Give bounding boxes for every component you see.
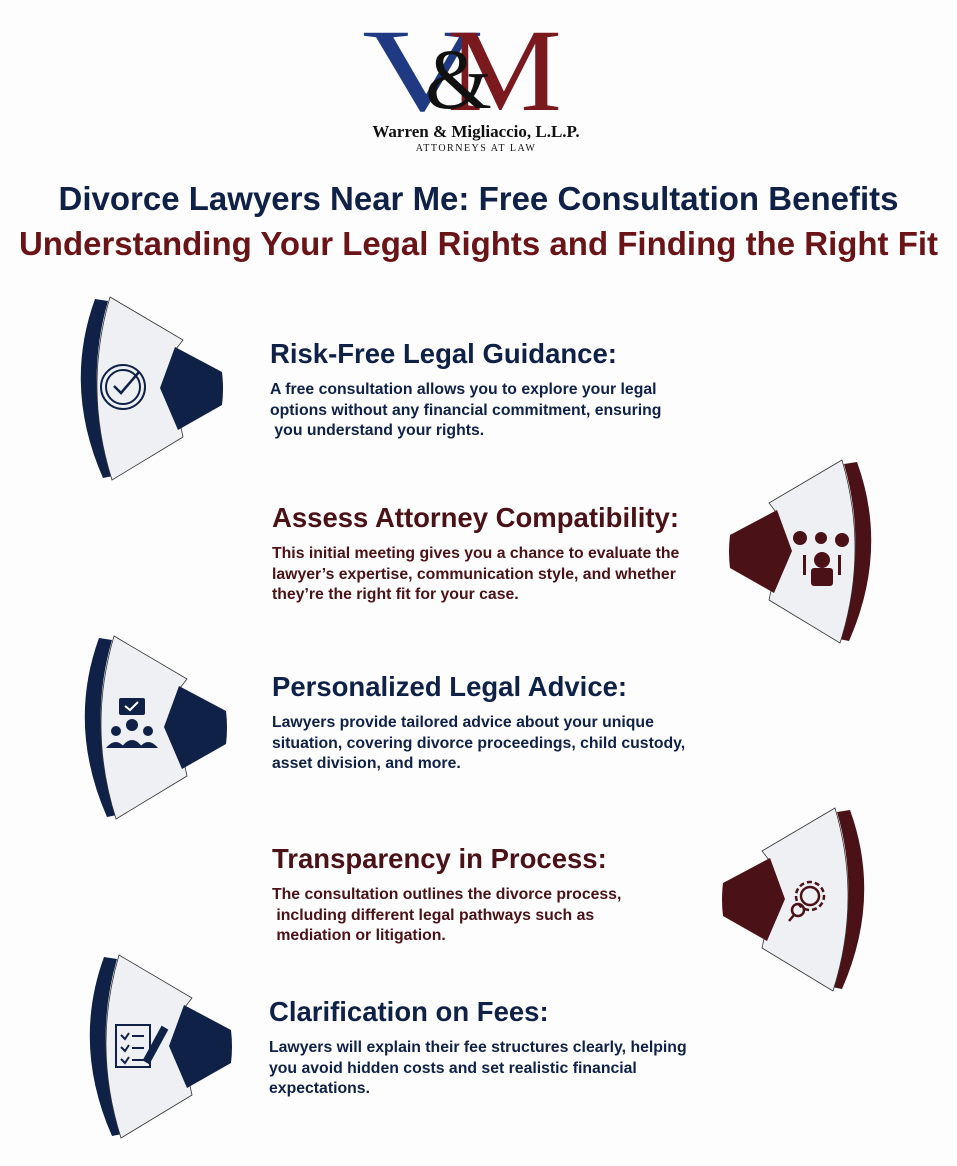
item 5 text — [269, 996, 687, 1097]
item 3 text: asset division, and more. — [272, 755, 461, 772]
subtitle: Understanding Your Legal Rights and Finding the Right Fit — [19, 225, 938, 262]
item 3 text: Lawyers provide tailored advice about your unique — [272, 714, 654, 731]
icon: transparency process gear — [722, 808, 864, 991]
item 4 text: mediation or litigation. — [276, 927, 446, 944]
item 3 text: situation, covering divorce proceedings, child custody, — [272, 734, 685, 752]
icon: personalized advice group — [85, 636, 227, 819]
item 1 text: options without any financial commitment, ensuring — [270, 402, 661, 418]
logo: ATTORNEYS AT LAW — [416, 143, 536, 154]
icon: fees document — [90, 955, 232, 1138]
logo: V — [362, 5, 482, 136]
item 2 text: This initial meeting gives you a chance to evaluate the — [272, 545, 679, 562]
item 3 text: Personalized Legal Advice: — [272, 671, 627, 702]
item 4 text: The consultation outlines the divorce process, — [272, 886, 621, 903]
item 2 text: lawyer’s expertise, communication style, and whether — [272, 566, 676, 582]
item 4 text: Transparency in Process: — [272, 843, 607, 874]
item 5 text: Clarification on Fees: — [269, 996, 549, 1027]
logo: M — [447, 5, 562, 136]
item 2 text: Assess Attorney Compatibility: — [272, 502, 679, 533]
logo — [362, 5, 580, 154]
item 3 text — [272, 671, 685, 772]
item 5 text: Lawyers will explain their fee structures clearly, helping — [269, 1039, 687, 1056]
item 5 text: expectations. — [269, 1080, 370, 1097]
item 2 text: they’re the right fit for your case. — [272, 586, 519, 603]
logo: Warren & Migliaccio, L.L.P. — [372, 122, 580, 141]
item 4 text: including different legal pathways such as — [276, 906, 594, 924]
item 1 text: you understand your rights. — [274, 422, 484, 439]
item 1 text — [270, 338, 661, 439]
icon: risk-free check — [81, 297, 223, 480]
item 4 text — [272, 843, 621, 944]
item 1 text: A free consultation allows you to explore your legal — [270, 381, 657, 398]
title: Divorce Lawyers Near Me: Free Consultation Benefits — [59, 180, 898, 217]
icon: compatibility — [729, 460, 871, 643]
logo: & — [425, 31, 492, 127]
item 5 text: you avoid hidden costs and set realistic financial — [269, 1060, 637, 1076]
item 1 text: Risk-Free Legal Guidance: — [270, 338, 617, 369]
item 2 text — [272, 502, 679, 603]
